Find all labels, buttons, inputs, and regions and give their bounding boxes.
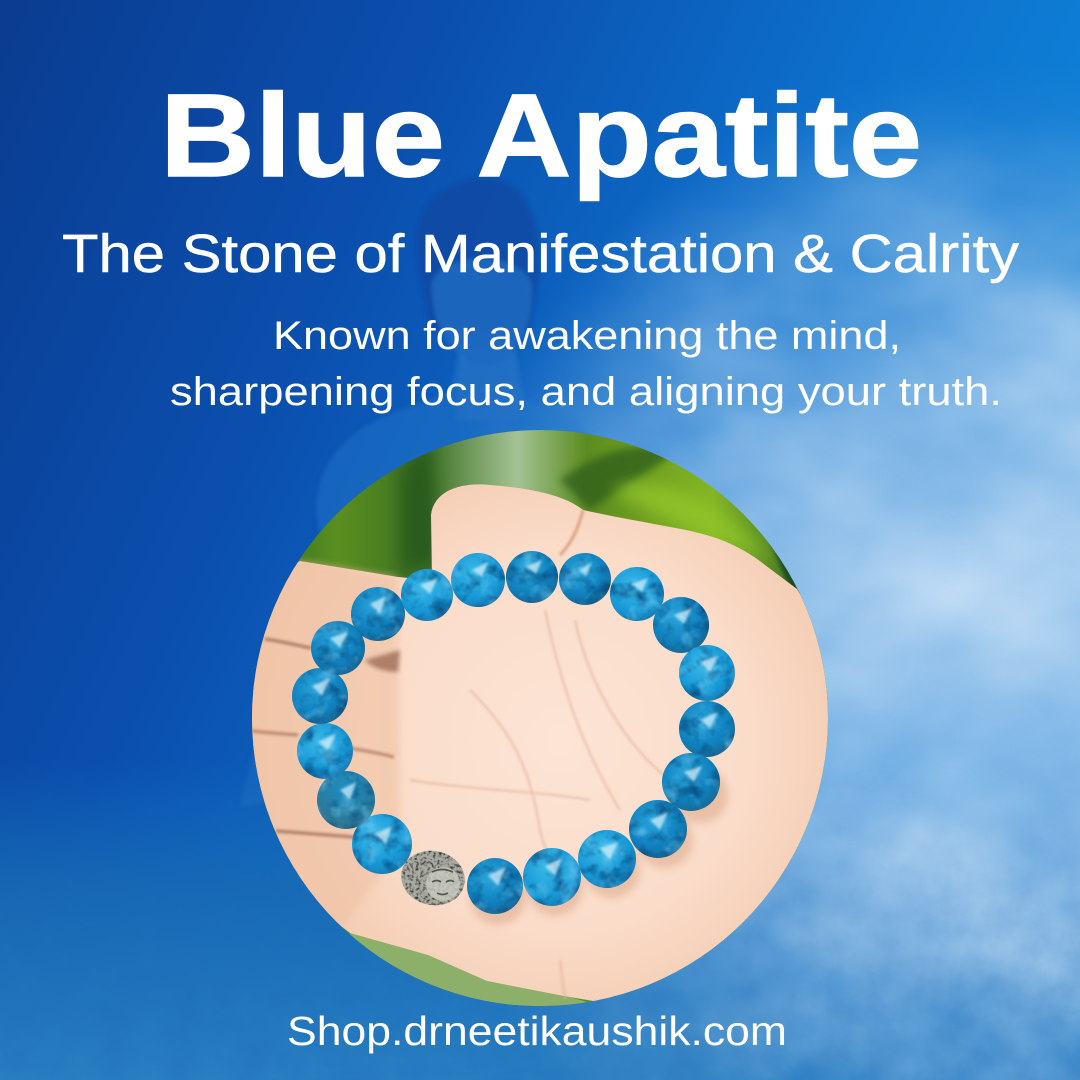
description text <box>170 314 1002 414</box>
subtitle: The Stone of Manifestation & Calrity <box>62 224 1019 284</box>
silver Buddha bead <box>401 850 465 906</box>
website URL: Shop.drneetikaushik.com <box>287 1008 787 1054</box>
bracelet beads <box>292 551 735 914</box>
finger creases and palm lines <box>252 610 670 1000</box>
circular photo: hand holding bracelet <box>230 430 850 1006</box>
title: Blue Apatite <box>160 70 922 202</box>
description text: sharpening focus, and aligning your truth. <box>170 370 1002 414</box>
bead shadows on palm <box>470 767 728 925</box>
bead highlights <box>312 560 718 886</box>
faint meditating woman silhouette <box>240 178 640 806</box>
photo background: green leaves <box>252 430 828 1006</box>
description text: Known for awakening the mind, <box>273 314 901 358</box>
hand: palm and fingers <box>230 484 850 1003</box>
